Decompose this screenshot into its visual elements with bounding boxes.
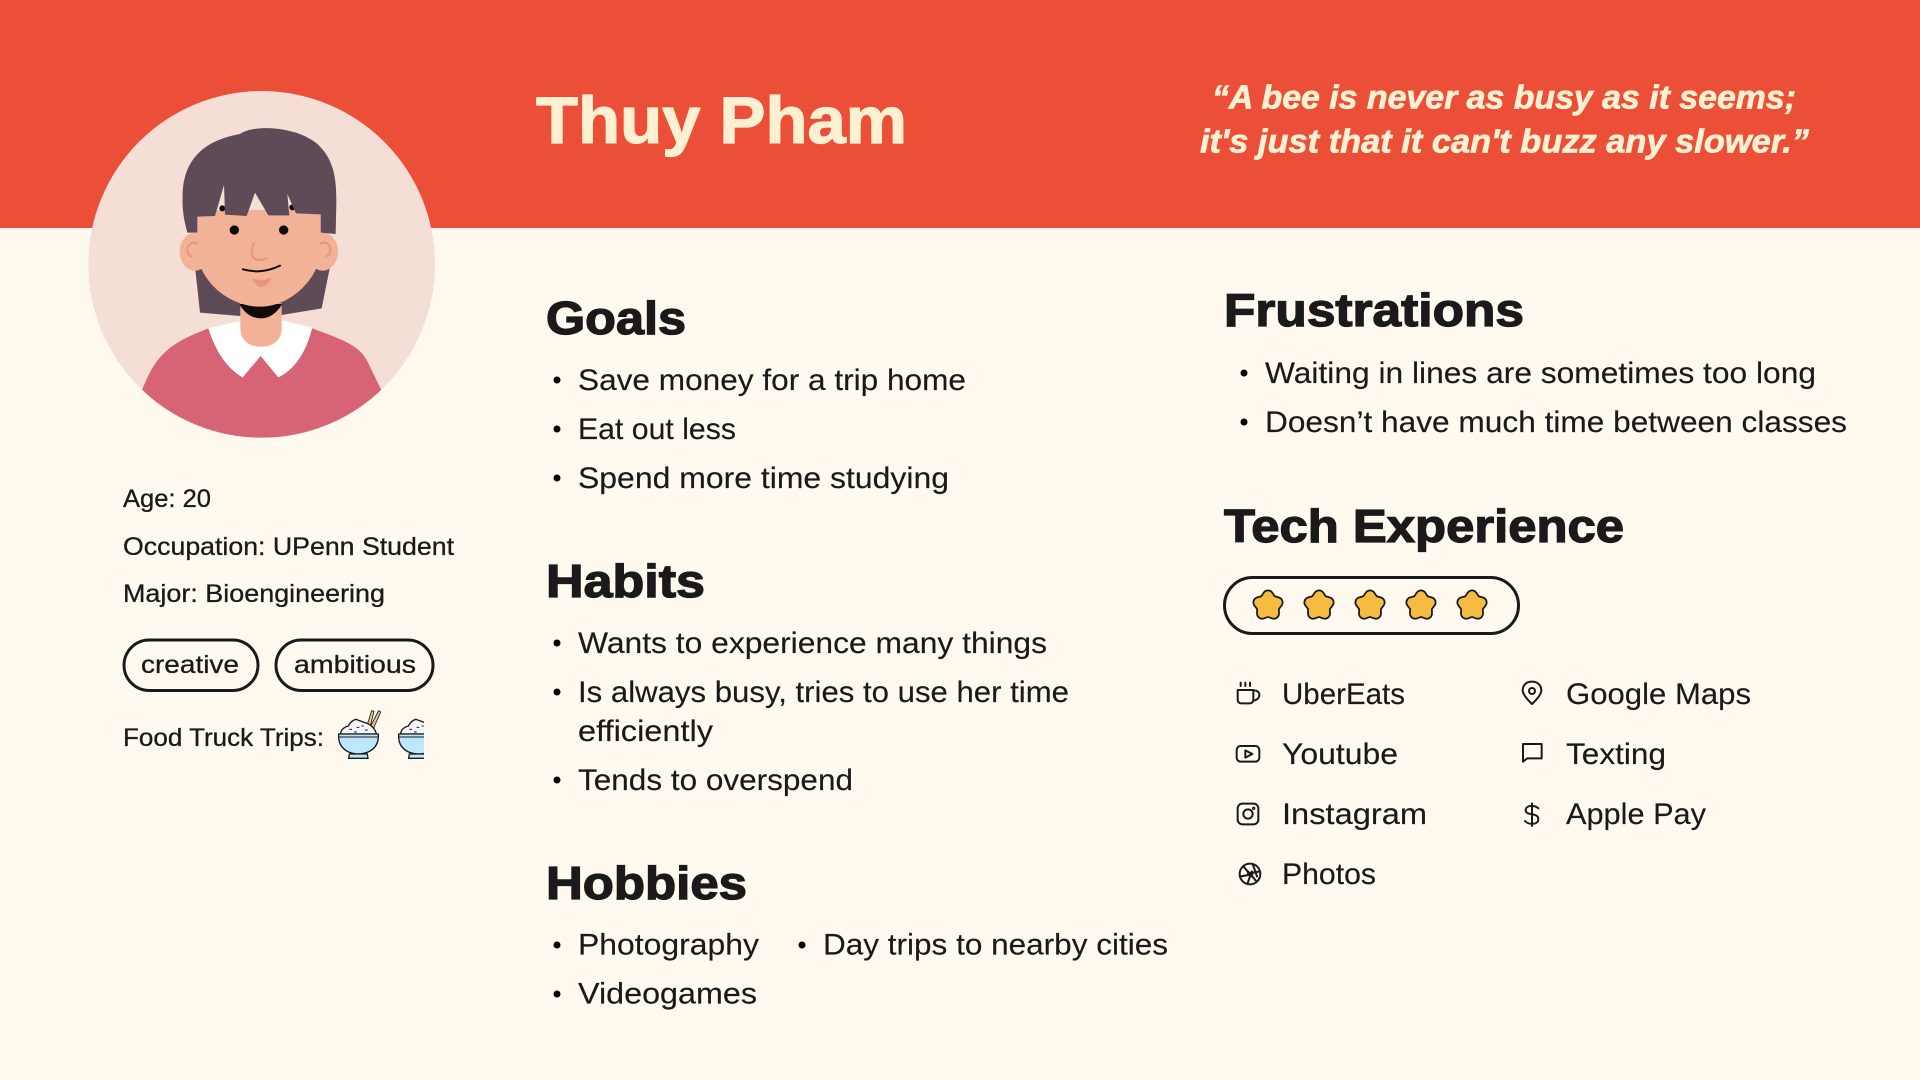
icon: speech bubble — [1523, 744, 1542, 762]
star 1 — [1258, 596, 1278, 614]
tag: ambitious: ambitious — [294, 651, 416, 679]
star 5 — [1462, 596, 1482, 614]
hobbies list: Day trips to nearby cities — [823, 928, 1168, 962]
app: photos: Photos — [1282, 858, 1376, 891]
icon: instagram — [1238, 804, 1258, 824]
heading: tech experience: Tech Experience — [1224, 500, 1624, 552]
habits list — [554, 627, 1069, 797]
goals list: Eat out less — [578, 413, 736, 446]
star 4 — [1411, 596, 1431, 614]
tag: ambitious — [276, 640, 433, 690]
heading: goals: Goals — [546, 292, 686, 344]
header banner — [0, 0, 1920, 228]
tag: creative: creative — [141, 651, 239, 679]
habits list: Wants to experience many things — [578, 627, 1047, 660]
profile details: Major: Bioengineering — [123, 580, 385, 608]
habits list: efficiently — [578, 715, 713, 748]
heading: frustrations: Frustrations — [1224, 284, 1524, 336]
icon: aperture — [1240, 864, 1260, 884]
icon: dollar — [1525, 803, 1538, 826]
app: apple pay: Apple Pay — [1566, 798, 1706, 831]
tag: creative — [124, 640, 258, 690]
heading: habits: Habits — [546, 555, 705, 607]
food truck trips label: Food Truck Trips: — [123, 724, 324, 752]
frustrations list — [1240, 357, 1847, 439]
hobbies list: Videogames — [578, 978, 757, 1010]
icon: rice bowl full — [339, 711, 381, 758]
app: ubereats: UberEats — [1282, 678, 1405, 711]
profile details: Occupation: UPenn Student — [123, 533, 454, 561]
frustrations list: Doesn’t have much time between classes — [1265, 406, 1847, 439]
icon: youtube — [1237, 746, 1259, 762]
habits list: Is always busy, tries to use her time — [578, 676, 1069, 709]
frustrations list: Waiting in lines are sometimes too long — [1265, 357, 1816, 390]
app: google maps: Google Maps — [1566, 678, 1751, 711]
app: instagram: Instagram — [1282, 798, 1427, 831]
goals list: Save money for a trip home — [578, 364, 966, 397]
star 3 — [1360, 596, 1380, 614]
star 2 — [1309, 596, 1329, 614]
profile details — [123, 485, 454, 608]
heading: hobbies: Hobbies — [546, 857, 747, 909]
hobbies list — [554, 928, 1168, 1010]
habits list: Tends to overspend — [578, 764, 853, 797]
quote: “A bee is never as busy as it seems; — [1212, 78, 1796, 116]
icon: cup — [1238, 683, 1259, 703]
profile details: Age: 20 — [123, 485, 211, 513]
app: texting: Texting — [1566, 738, 1666, 771]
goals list — [554, 364, 966, 495]
goals list: Spend more time studying — [578, 462, 949, 495]
avatar portrait — [88, 91, 435, 440]
icon: map pin — [1523, 682, 1541, 704]
title: Thuy Pham — [536, 83, 907, 157]
app: youtube: Youtube — [1282, 738, 1398, 771]
hobbies list: Photography — [578, 928, 759, 962]
quote — [1200, 78, 1810, 160]
star rating pill — [1224, 578, 1518, 634]
icon: rice bowl partial — [398, 718, 424, 759]
quote: it's just that it can't buzz any slower.” — [1200, 122, 1810, 160]
